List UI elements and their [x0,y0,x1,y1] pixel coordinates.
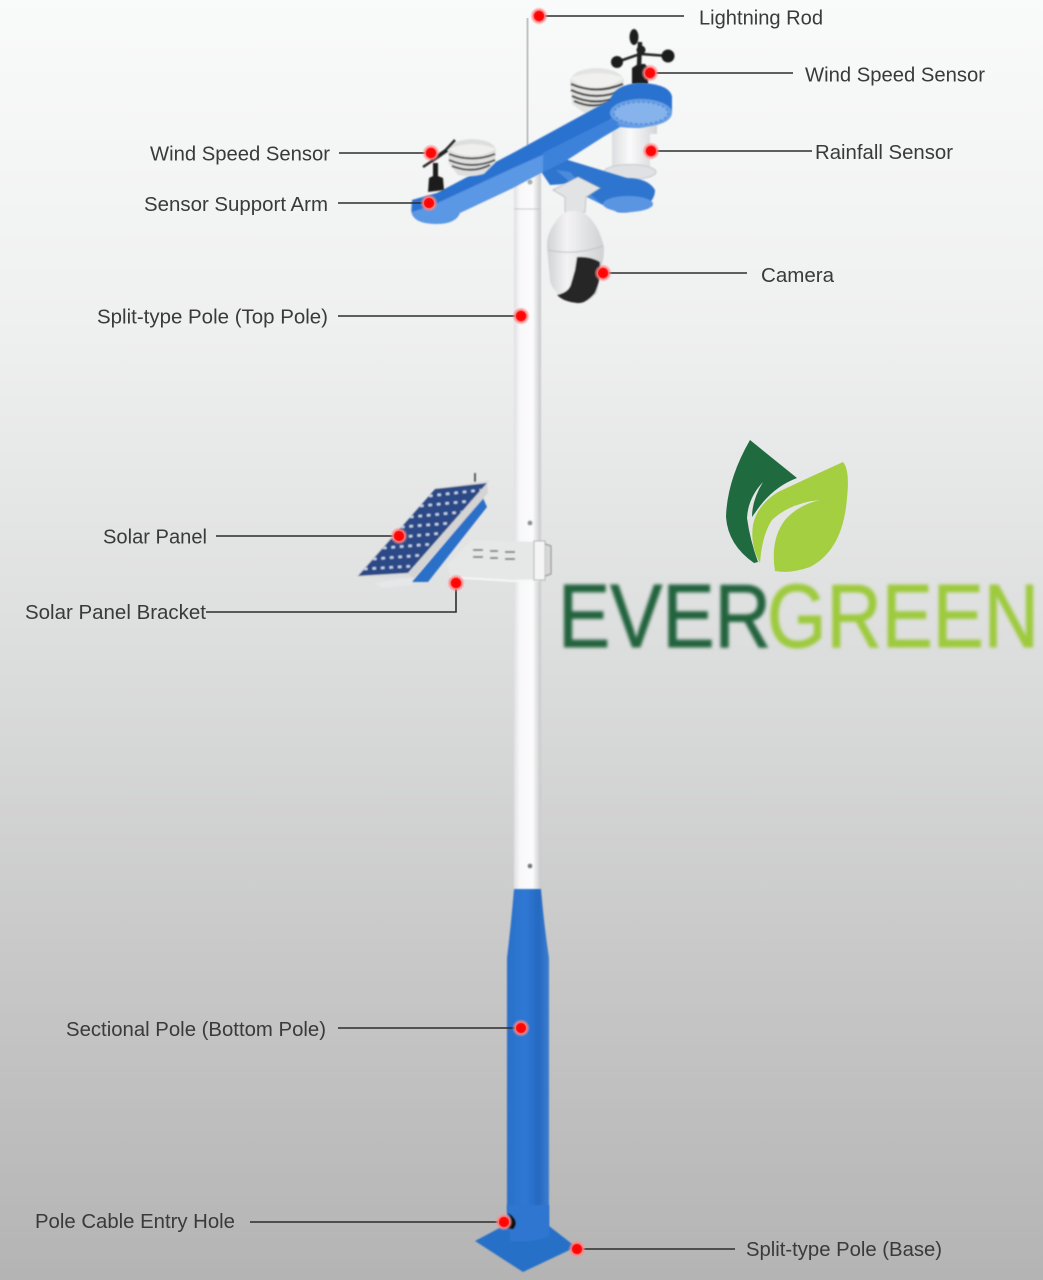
solar panel [355,473,490,588]
sensor support arm [411,83,672,224]
label: split-type pole top [97,306,530,328]
label: solar panel [103,526,408,548]
label: wind speed sensor right: Wind Speed Sensor [805,64,985,86]
label: split-type pole base: Split-type Pole (Base) [746,1239,942,1261]
label: lightning rod: Lightning Rod [699,8,823,30]
label: camera [594,264,835,287]
label: sectional pole bottom: Sectional Pole (Bottom Pole) [66,1019,326,1041]
label: sensor support arm [144,194,438,216]
label: camera: Camera [761,265,835,287]
label: wind speed sensor left: Wind Speed Sensor [150,144,330,166]
pole base plate [475,1205,576,1272]
label: solar panel bracket: Solar Panel Bracket [25,602,206,624]
logo wordmark [558,567,1039,667]
label: split-type pole base [568,1239,942,1261]
sectional pole (bottom pole) [507,889,549,1228]
solar panel bracket [447,540,551,581]
temperature and humidity shield (left) [448,139,496,176]
label: split-type pole top: Split-type Pole (Top Pole) [97,306,328,328]
label: wind speed sensor right [641,64,985,86]
pole cable entry hole [507,1213,516,1229]
lightning rod [526,18,528,145]
label: lightning rod [530,7,823,30]
label: pole cable entry hole: Pole Cable Entry Hole [35,1211,235,1233]
camera [547,177,604,303]
logo leaves [726,440,848,572]
label: sensor support arm: Sensor Support Arm [144,194,328,216]
wind speed sensor (left) [423,140,455,192]
label: sectional pole bottom [66,1019,530,1041]
rainfall sensor [604,125,657,180]
wind speed sensor (right anemometer) [611,29,674,84]
label: rainfall sensor: Rainfall Sensor [815,142,953,164]
label: solar panel: Solar Panel [103,526,207,548]
split-type pole (top pole) [514,166,541,892]
label: rainfall sensor [642,142,953,164]
logo wordmark: EVER [558,567,771,667]
temperature and humidity shield (right) [570,68,624,114]
label: pole cable entry hole [35,1211,513,1233]
label: solar panel bracket [25,574,465,624]
label: wind speed sensor left [150,144,440,166]
